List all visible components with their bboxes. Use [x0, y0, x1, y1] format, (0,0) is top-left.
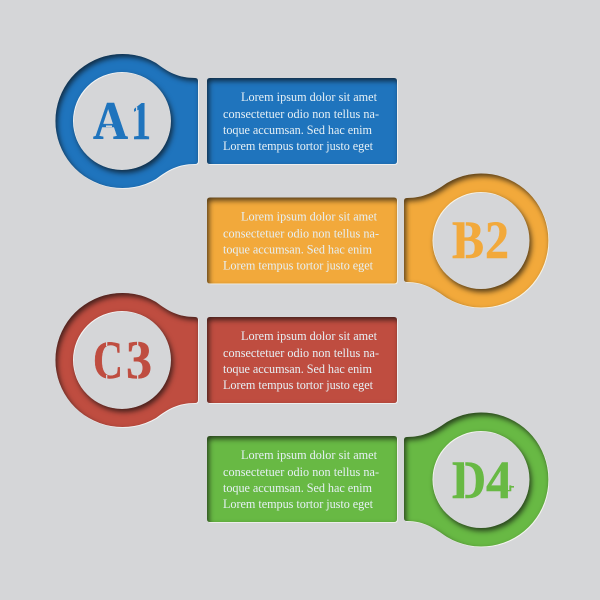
text panel: C3: toque accumsan. Sed hac enim: [223, 362, 373, 376]
label: C3: C: [93, 330, 123, 390]
text panel: B2: toque accumsan. Sed hac enim: [223, 242, 373, 256]
label: C3: [93, 330, 152, 390]
label: D4: 4: [486, 450, 512, 510]
panel: C3: [55, 293, 398, 428]
text panel: D4: Lorem tempus tortor justo eget: [223, 497, 374, 511]
text panel: A1: Lorem ipsum dolor sit amet: [241, 90, 378, 104]
label: A1: 1: [131, 91, 151, 151]
label: B2: B: [452, 210, 484, 270]
text panel: D4: consectetuer odio non tellus na-: [223, 465, 379, 479]
panel: A1: [55, 54, 398, 189]
text panel: A1: consectetuer odio non tellus na-: [223, 107, 379, 121]
label: A1: [93, 91, 151, 151]
label: D4: [452, 450, 514, 510]
text panel: D4: Lorem ipsum dolor sit amet: [241, 448, 378, 462]
text panel: D4: toque accumsan. Sed hac enim: [223, 481, 373, 495]
text panel: C3: Lorem tempus tortor justo eget: [223, 378, 374, 392]
badge: B2 ring: [404, 174, 549, 308]
label: B2: 2: [485, 210, 509, 270]
text panel: A1: [207, 78, 398, 165]
text panel: C3: consectetuer odio non tellus na-: [223, 346, 379, 360]
label: A1: A: [93, 91, 128, 151]
text panel: B2: Lorem ipsum dolor sit amet: [241, 210, 378, 224]
text panel: A1: Lorem tempus tortor justo eget: [223, 139, 374, 153]
panel: D4: [207, 412, 549, 547]
text panel: B2: Lorem tempus tortor justo eget: [223, 258, 374, 272]
badge: C3 ring: [55, 293, 199, 428]
label: C3: 3: [126, 330, 152, 390]
badge: D4 ring: [404, 412, 549, 547]
text panel: D4: [207, 436, 398, 523]
panel: B2: [207, 174, 549, 308]
text panel: C3: Lorem ipsum dolor sit amet: [241, 329, 378, 343]
text panel: B2: [207, 198, 398, 284]
label: D4: D: [452, 450, 486, 510]
text panel: C3: [207, 317, 398, 404]
badge: A1 ring: [55, 54, 199, 189]
text panel: A1: toque accumsan. Sed hac enim: [223, 123, 373, 137]
label: B2: [452, 210, 509, 270]
text panel: B2: consectetuer odio non tellus na-: [223, 226, 379, 240]
